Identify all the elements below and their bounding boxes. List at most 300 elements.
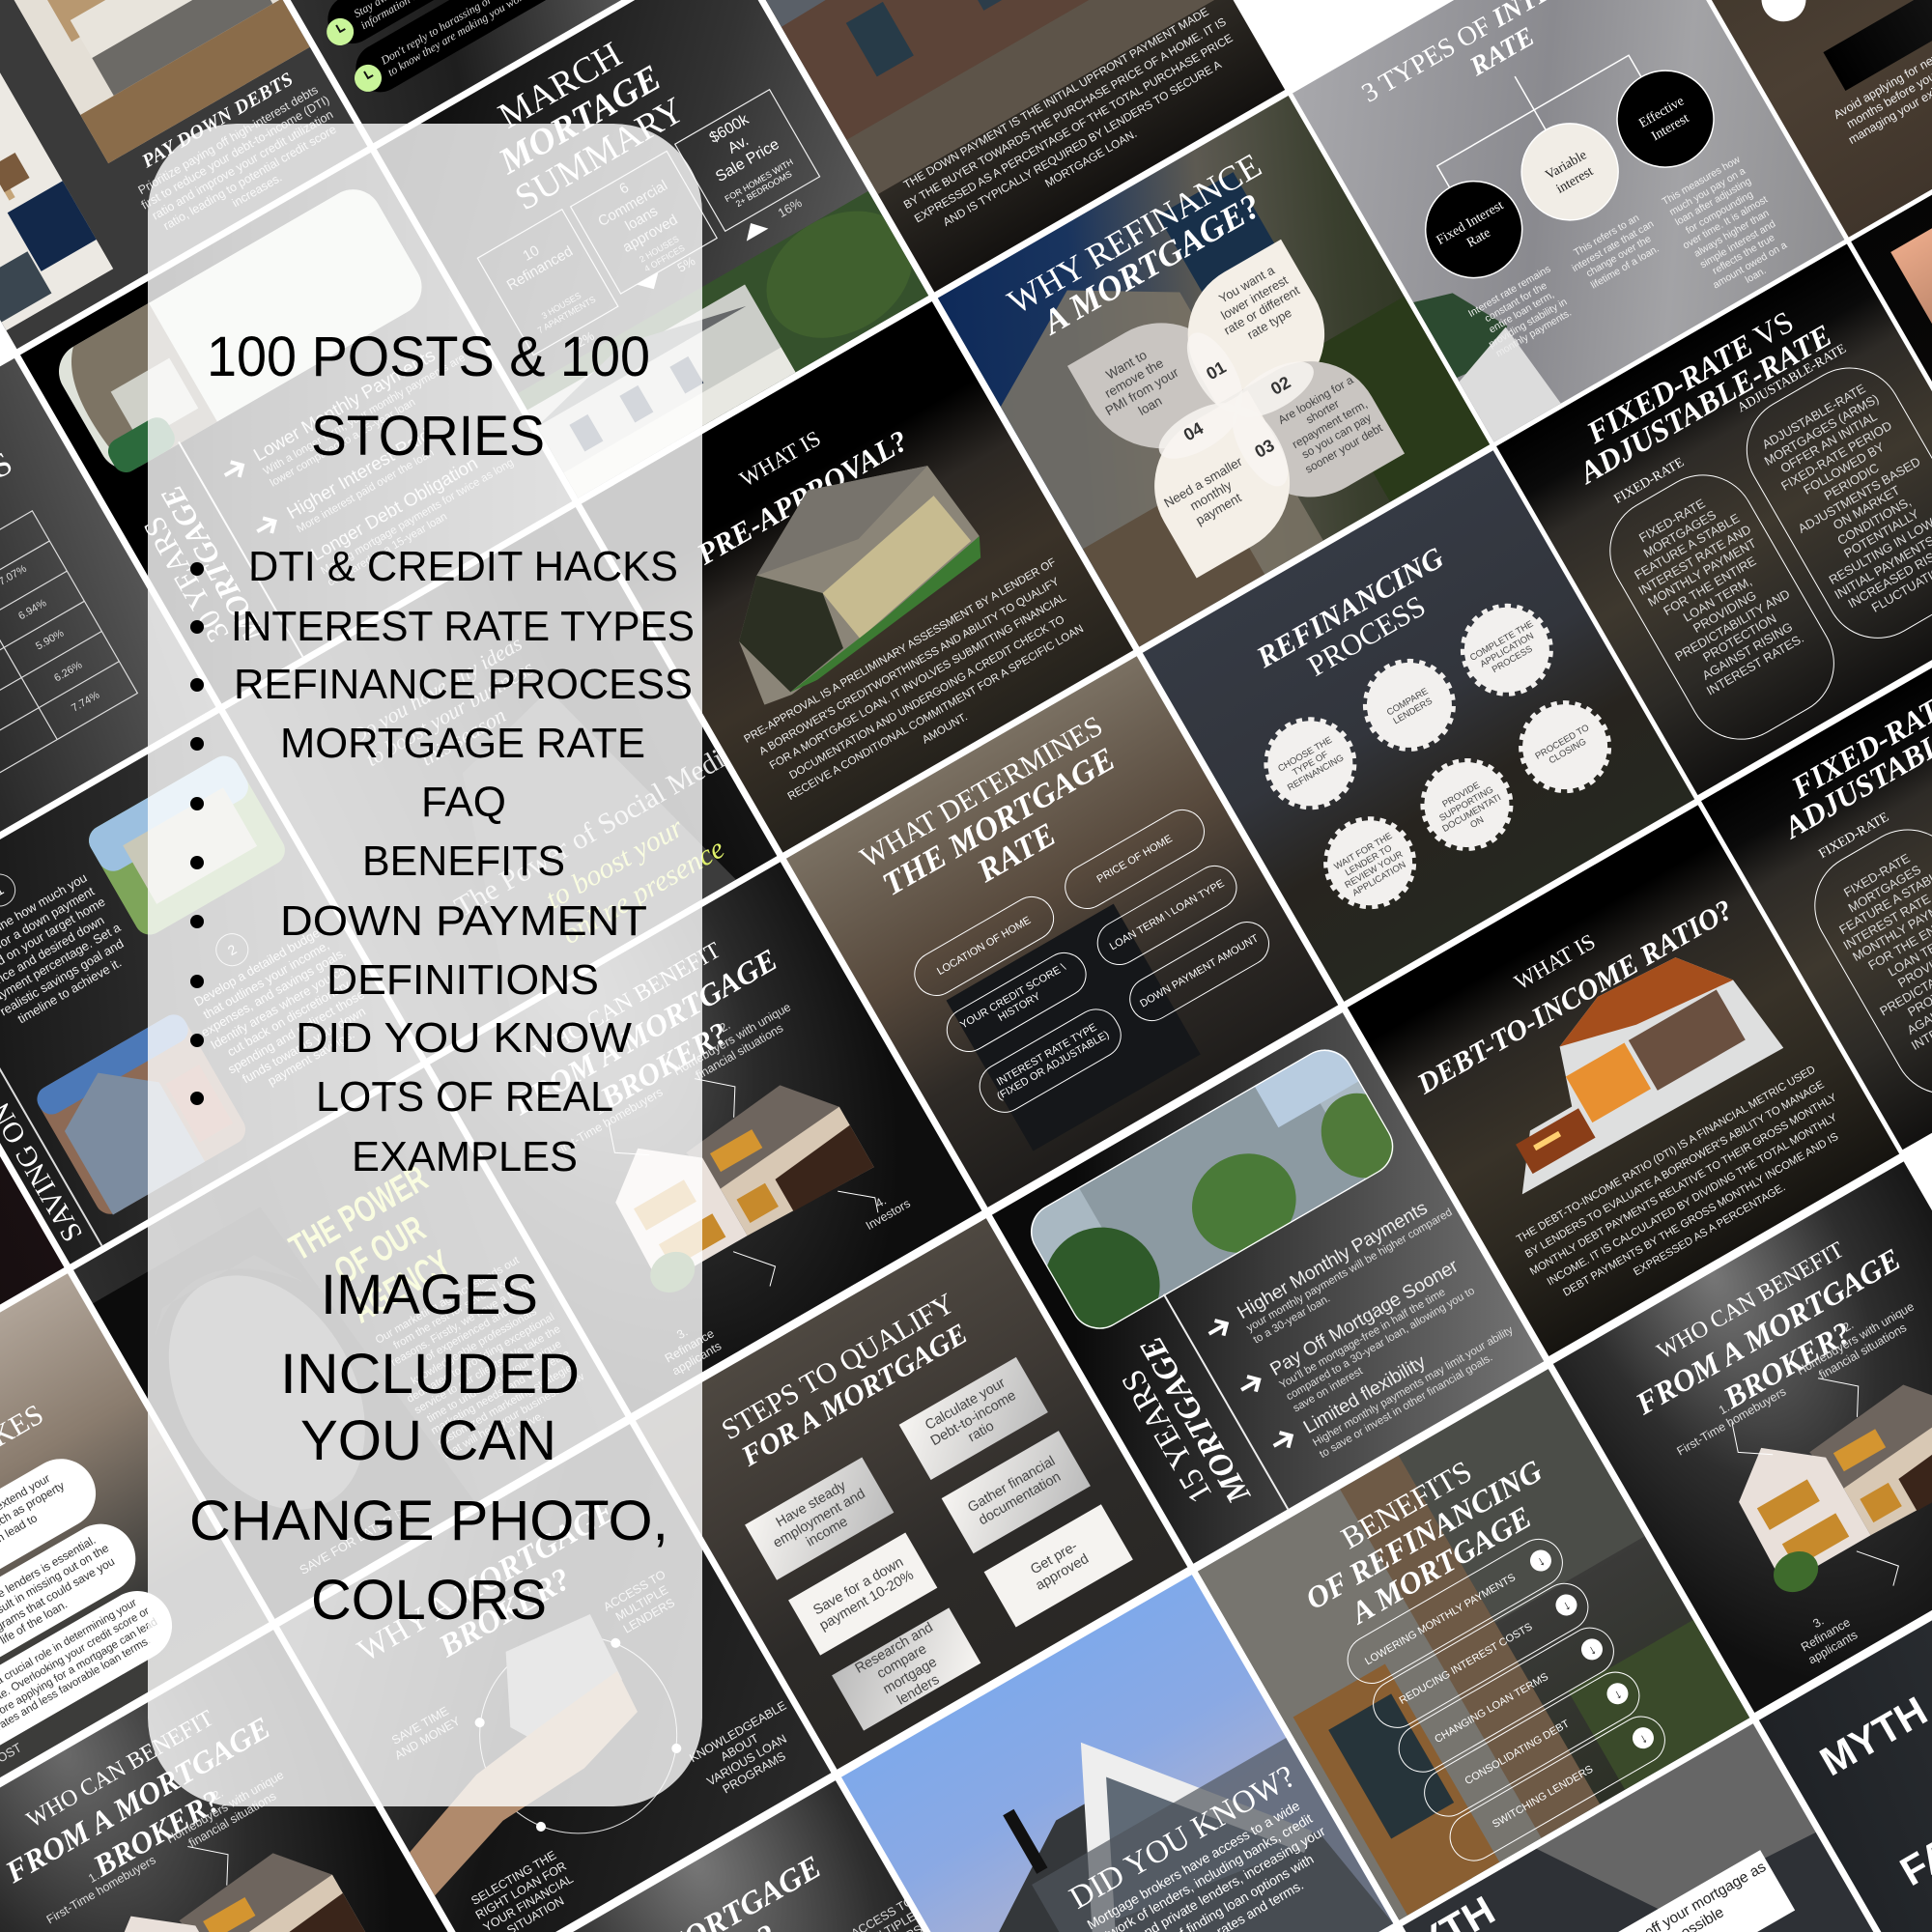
card: mortgage broker copy [485, 1780, 1037, 1932]
column label: ADJUSTABLE-RATE [1735, 342, 1849, 415]
step card [942, 1431, 1091, 1553]
label: Refinance applicants [663, 1326, 724, 1378]
text under circle: This refers to an interest rate that can change over the lifetime of a loan. [1570, 213, 1661, 291]
pill: ↓ [1636, 1729, 1650, 1747]
arrow icons [1200, 1309, 1307, 1465]
title: BROKER? [1718, 1315, 1857, 1415]
pill: INTEREST RATE TYPE (FIXED OR ADJUSTABLE) [995, 1022, 1111, 1102]
title [1370, 843, 1762, 1118]
pill: ↓ [1534, 1552, 1548, 1569]
card: myth statement [1403, 1723, 1932, 1932]
card: 15 years mortgage [992, 1012, 1544, 1564]
card: who can benefit (bottom left copy) [0, 1630, 474, 1932]
card: fixed-rate vs adjustable-rate [1496, 243, 1932, 795]
column label: FIXED-RATE [1612, 455, 1687, 507]
stat text: 2 HOUSES [638, 234, 681, 265]
column label: FIXED-RATE [1817, 810, 1891, 862]
body text: EXPRESSED AS A PERCENTAGE. [1632, 1181, 1787, 1278]
stat text: loans [622, 203, 661, 235]
step card: Research and compare mortgage lenders [852, 1620, 942, 1708]
title: BENEFITS [1335, 1453, 1477, 1555]
vertical divider [0, 1056, 102, 1246]
stat text: $600k [707, 111, 752, 147]
text: Do you have any ideas [346, 631, 526, 749]
label: SAVE TIME AND MONEY [389, 1704, 463, 1762]
row text: Making mortgage payments for twice as long compared to a 15-year loan [319, 457, 516, 588]
step card: Have steady employment and income [771, 1478, 867, 1551]
petal text: You want a lower interest rate or different rate type [1216, 263, 1302, 342]
photo: hand and shirt [225, 507, 777, 1059]
panel text: INTEREST RATE TYPES [231, 603, 695, 650]
panel text: LOTS OF REAL [316, 1073, 613, 1121]
body text: FOR A MORTGAGE LOAN. IT INVOLVES SUBMITTING FINANCIAL [768, 592, 1068, 772]
title: FOR A MORTGAGE [736, 1318, 973, 1473]
row text: Limited flexibility [1300, 1351, 1430, 1438]
title: WHO CAN BENEFIT [1653, 1237, 1848, 1365]
label: ACCESS TO MULTIPLE LENDERS [601, 1568, 677, 1636]
scalloped circles: LENDERS [1391, 696, 1435, 726]
pill: YOUR CREDIT SCORE \ HISTORY [958, 962, 1068, 1032]
label: Refinance applicants [1799, 1615, 1860, 1667]
scalloped circles: LENDER TO [1344, 843, 1394, 878]
step card [745, 1458, 894, 1580]
scalloped circles: APPLICATION [1350, 860, 1408, 898]
card: what determines mortgage rate [786, 656, 1338, 1208]
label [143, 1747, 307, 1867]
photo: modern house [1198, 1369, 1749, 1920]
scalloped circles: DOCUMENTATI [1440, 792, 1503, 835]
body text: DOCUMENTATION AND UNDERGOING A CREDIT CHECK TO [787, 613, 1066, 781]
card: who can benefit (right) [1553, 1161, 1932, 1713]
title: THE MORTGAGE [876, 741, 1122, 903]
translucent text panel [148, 124, 702, 1806]
tip pill [0, 1511, 148, 1734]
panel text: EXAMPLES [352, 1133, 578, 1180]
step card: Gather financial documentation [965, 1454, 1064, 1528]
rates table: 5.90% [34, 627, 66, 653]
title: ADJUSTABLE-RATE [1574, 317, 1837, 490]
portrait tones [73, 1154, 475, 1619]
text: to boost your [540, 811, 689, 916]
body text: Prioritize paying off high-interest debts first to reduce your debt-to-income (DTI) ratio and improve your credit utilization ratio, leading to potential credit score increases. [136, 83, 339, 233]
row text: Pay Off Mortgage Sooner [1266, 1256, 1462, 1380]
panel text: DID YOU KNOW [296, 1014, 632, 1062]
card: myth vs fact dark [1759, 1518, 1932, 1932]
heading: MYTH [1812, 1688, 1932, 1784]
panel text: IMAGES [321, 1264, 538, 1326]
stat text: 2+ BEDROOMS [734, 169, 794, 209]
label [530, 1065, 679, 1167]
body text: THE DEBT-TO-INCOME RATIO (DTI) IS A FINANCIAL METRIC USED [1515, 1064, 1817, 1245]
petal text: Are looking for a shorter repayment term, so you can pay sooner your debt [1276, 373, 1384, 475]
panel text: DEFINITIONS [327, 956, 599, 1004]
vertical title: 30 YEARS [136, 511, 236, 648]
right outline column [1727, 348, 1932, 658]
title: A MORTGAGE [1345, 1499, 1537, 1631]
panel text: 100 POSTS & 100 [207, 326, 650, 388]
icon: crescent moon [1750, 0, 1817, 32]
left text: FIXED-RATE MORTGAGES FEATURE A STABLE INTEREST RATE AND MONTHLY PAYMENT FOR THE ENTIRE LOAN TERM, PROVIDING PREDICTABILITY AND PROTECTION AGAINST RISING INTEREST RATES. [1632, 496, 1806, 697]
body text: AMOUNT. [921, 711, 969, 746]
stat text: 7 APARTMENTS [536, 295, 597, 335]
title: PRE-APPROVAL? [692, 423, 914, 571]
text: The Power of Social Media [449, 736, 741, 923]
label: 3. [1810, 1614, 1826, 1631]
tip pill [0, 1578, 185, 1801]
scalloped circles: TYPE OF [1291, 750, 1330, 779]
rates table [0, 445, 139, 773]
pill [1441, 1707, 1674, 1870]
body text [721, 542, 1124, 838]
label: 1. [593, 1101, 609, 1118]
scalloped circles: REVIEW YOUR [1343, 849, 1405, 891]
photo: white farmhouse [0, 1630, 474, 1932]
label: 1. [1717, 1401, 1732, 1417]
vertical divider [1163, 1293, 1289, 1510]
save icon: SAVE FOR LATER ⚐ [297, 1505, 409, 1577]
step card [832, 1607, 980, 1731]
row text: Longer Debt Obligation [308, 453, 482, 565]
title [1167, 493, 1550, 752]
card: dark corner [0, 919, 64, 1470]
title [1222, 1388, 1625, 1681]
body text: MORTGAGE LOAN. [1042, 127, 1139, 190]
title: BROKER? [434, 1562, 577, 1664]
pill: PRICE OF HOME [1094, 833, 1175, 885]
black pills with clock icons [327, 0, 561, 93]
scalloped circles: REFINANCING [1286, 753, 1346, 793]
pill [1057, 802, 1212, 917]
dark kitchen block [947, 904, 1201, 1151]
title: BROKER? [87, 1783, 227, 1884]
row text: Higher monthly payments may limit your ability to save or invest in other financial goals. [1311, 1324, 1516, 1461]
stat text: 10 [520, 242, 542, 265]
label [23, 1833, 172, 1932]
stat text: Commercial [595, 177, 670, 230]
vertical title: MORTGAGE [1133, 1330, 1258, 1509]
pill: DOWN PAYMENT AMOUNT [1138, 932, 1261, 1009]
step number: 2 [225, 941, 240, 958]
connector lines and circles: Variable [1543, 148, 1589, 184]
title: WHAT IS [735, 426, 825, 492]
photo: suburban house [83, 751, 291, 940]
stat boxes and trend triangles [477, 89, 821, 355]
stat boxes and trend triangles: 16% [776, 195, 805, 220]
panel text: FAQ [421, 779, 506, 826]
title: REFINANCING [1251, 540, 1449, 674]
rates table: 6.26% [52, 659, 84, 684]
title: MORTAGE [492, 57, 668, 183]
card: power of social media [225, 507, 777, 1059]
title: FIXED-RATE VS [1580, 303, 1800, 450]
stat text: 6 [616, 180, 632, 198]
row text: Lower Monthly Payments [250, 345, 440, 466]
connector lines and circles [1293, 0, 1844, 442]
step card: Save for a down payment 10-20% [810, 1554, 917, 1634]
pill: LOAN TERM \ LOAN TYPE [1108, 877, 1226, 952]
connector lines and circles: Fixed Interest [1435, 198, 1506, 248]
rates table: 7.74% [70, 690, 101, 715]
label: Homebuyers with unique financial situations [164, 1768, 286, 1850]
pill: LOWERING MONTHLY PAYMENTS [1363, 1572, 1518, 1667]
stat text: FOR HOMES WITH [723, 156, 795, 204]
title: STEPS TO QUALIFY [717, 1287, 960, 1446]
photo: kitchen [0, 72, 114, 330]
title: SUMMARY [508, 90, 692, 218]
panel text: CHANGE PHOTO, [189, 1490, 668, 1552]
title [443, 885, 850, 1184]
title: AGENCY [345, 1243, 458, 1331]
body text: EXPRESSED AS A PERCENTAGE OF THE TOTAL PURCHASE PRICE [912, 31, 1235, 225]
body text: PRE-APPROVAL IS A PRELIMINARY ASSESSMENT BY A LENDER OF [742, 556, 1058, 746]
vertical title: MORTGAGE [154, 479, 271, 648]
step card: Calculate your Debt-to-income ratio [923, 1376, 1018, 1449]
card: power of our agency [73, 1067, 625, 1619]
card: 30 years mortgage [20, 153, 572, 703]
title: MARCH [492, 34, 629, 137]
scalloped circles: CHOOSE THE [1276, 735, 1334, 775]
connector lines and circles: Interest [1649, 111, 1691, 144]
pill: CHANGING LOAN TERMS [1433, 1671, 1550, 1746]
body text: THE DOWN PAYMENT IS THE INITIAL UPFRONT PAYMENT MADE [901, 5, 1211, 191]
title: WHAT IS [1510, 929, 1600, 995]
title [280, 1155, 480, 1345]
circle with house in hand [279, 1424, 831, 1932]
four petal diagram: 01 [1203, 357, 1230, 384]
title: OF OUR [327, 1208, 432, 1293]
panel text: BENEFITS [362, 838, 565, 885]
stat text [595, 177, 686, 273]
row text: With a longer term, your monthly payments are lower compared to a 15-year loan [262, 352, 468, 489]
title [798, 676, 1202, 971]
row text [1266, 1243, 1503, 1416]
title: WHAT DETERMINES [855, 710, 1108, 874]
title: DEBT-TO-INCOME RATIO? [1412, 894, 1738, 1100]
card: fixed-rate vs adjustable-rate (copy) [1701, 599, 1932, 1150]
body text: DEBT PAYMENTS BY THE GROSS MONTHLY INCOME AND IS [1561, 1131, 1840, 1299]
photo: white farmhouse [1553, 1161, 1932, 1713]
card: refinancing process [1143, 450, 1694, 1002]
scalloped circles: PROCEED TO [1534, 723, 1591, 762]
title: WHY A MORTGAGE [353, 1493, 621, 1669]
label: 2. [717, 1018, 732, 1035]
panel text: DOWN PAYMENT [280, 897, 647, 945]
four petal diagram [938, 96, 1490, 647]
stat text: Av. [725, 132, 752, 157]
four petal diagram: 03 [1251, 436, 1278, 462]
text: online presence [556, 833, 730, 951]
label [1774, 1279, 1932, 1399]
title: FROM A MORTGAGE [506, 942, 783, 1122]
scalloped circles: COMPARE [1385, 686, 1430, 718]
pill [1089, 858, 1245, 973]
panel text: REFINANCE PROCESS [234, 661, 693, 708]
card: why mortgage broker [279, 1424, 831, 1932]
stat boxes and trend triangles: 12% [568, 328, 597, 354]
title: FROM A MORTGAGE [0, 1710, 276, 1889]
stat text [707, 111, 795, 209]
pill [1390, 1619, 1623, 1781]
title [492, 34, 692, 218]
petal text: Want to remove the PMI from your loan [1102, 348, 1181, 418]
photo: gabled roof [841, 1575, 1393, 1932]
card: clock list on dark photo [172, 0, 724, 143]
pill: ↓ [1610, 1686, 1624, 1702]
label: 3. [674, 1325, 690, 1342]
pill [906, 889, 1062, 1004]
card: down payment definition [733, 0, 1285, 292]
pill: CONSOLIDATING DEBT [1463, 1718, 1572, 1787]
body text: MONTHLY DEBT PAYMENTS RELATIVE TO THEIR GROSS MONTHLY [1528, 1092, 1839, 1278]
text [254, 578, 645, 850]
text: to boost your business [361, 655, 538, 771]
label: First-Time homebuyers [44, 1853, 158, 1926]
step card [899, 1357, 1048, 1480]
title [508, 1821, 895, 1932]
connector lines and circles: Rate [1464, 226, 1493, 251]
title [0, 1653, 343, 1932]
photo: gray blue townhouse [32, 1009, 251, 1220]
row text: You'll be mortgage-free in half the time compared to a 30-year loan, allowing you to save on interest [1278, 1286, 1477, 1414]
pill: ↓ [1585, 1641, 1599, 1658]
pill [1364, 1575, 1598, 1737]
pill [971, 1001, 1129, 1122]
title [594, 339, 990, 620]
scalloped circles [1143, 450, 1694, 1002]
vertical title [1100, 1320, 1264, 1536]
label: 4. [873, 1194, 889, 1210]
dark house siding [1403, 1723, 1932, 1932]
photo: bedroom [14, 0, 310, 164]
body text: AND IS TYPICALLY REQUIRED BY LENDERS TO SECURE A [941, 58, 1224, 229]
pill: ↓ [1559, 1597, 1573, 1613]
card: saving on down payment [0, 713, 420, 1264]
label: 2. [211, 1786, 226, 1803]
title [1567, 1185, 1932, 1485]
title: WHY REFINANCE [1001, 146, 1267, 322]
step card [984, 1504, 1133, 1627]
card: benefits of refinancing a mortgage [1198, 1369, 1749, 1920]
text [411, 713, 819, 1015]
tip pill [0, 1446, 108, 1668]
panel text: MORTGAGE RATE [280, 720, 645, 767]
vertical divider [178, 441, 303, 657]
vertical title: 15 YEARS [1115, 1363, 1219, 1509]
card: why refinance a mortgage [938, 96, 1490, 647]
body text: RECEIVE A CONDITIONAL COMMITMENT FOR A SPECIFIC LOAN [786, 623, 1086, 803]
title: THE POWER [283, 1158, 435, 1269]
row text: your monthly payments will be higher compared to a 30-year loan. [1245, 1208, 1455, 1347]
card: pre-approval [582, 301, 1133, 853]
panel text: STORIES [311, 405, 545, 468]
title: RATE [1464, 21, 1540, 82]
step number [0, 867, 21, 913]
label: First-Time homebuyers [1674, 1384, 1788, 1459]
arrow icons [224, 460, 277, 533]
pill [1339, 1530, 1572, 1692]
translucent text area [1032, 1738, 1393, 1932]
row text: More interest paid over the loan [295, 447, 436, 535]
card: steps to qualify for a mortgage [636, 1218, 1187, 1770]
label [645, 1308, 734, 1384]
title [1304, 0, 1686, 167]
card: table of rates [0, 358, 215, 909]
pill [1122, 914, 1277, 1029]
row text: Higher Interest Paid [284, 425, 435, 524]
scalloped circles: COMPLETE THE [1468, 619, 1535, 664]
step text: Develop a detailed budget that outlines your income, expenses, and savings goals. Identify areas where you can cut back on discretionary spending and redirect those funds towards your down payment savings. [191, 923, 368, 1089]
title: WHO CAN BENEFIT [529, 938, 725, 1065]
step card [788, 1532, 937, 1656]
scalloped circles: APPLICATION [1478, 631, 1536, 670]
label: Homebuyers with unique financial situations [1795, 1299, 1917, 1381]
title: BROKER? [594, 1015, 734, 1116]
connector lines and circles: Effective [1636, 94, 1687, 131]
photo: white farmhouse [430, 862, 981, 1413]
stat boxes and trend triangles: 5% [675, 253, 698, 275]
text under circle: Interest rate remains constant for the entire loan term, providing stability in monthly payments. [1466, 263, 1574, 360]
left outline column [1590, 455, 1854, 759]
stat text [504, 242, 597, 335]
panel text: COLORS [311, 1569, 547, 1632]
pill: REDUCING INTEREST COSTS [1398, 1621, 1534, 1707]
label: KNOWLEDGEABLE ABOUT VARIOUS LOAN PROGRAMS [687, 1698, 789, 1796]
title: DID YOU KNOW? [1064, 1759, 1301, 1917]
card: 3 types of interest rate [1293, 0, 1844, 442]
stat text: Sale Price [713, 136, 782, 185]
title: A MORTGAGE? [1037, 185, 1267, 342]
four petal diagram: 04 [1180, 418, 1207, 444]
title: PROCESS [1302, 588, 1431, 683]
pill [1415, 1662, 1649, 1826]
title: FROM A MORTGAGE [1630, 1241, 1906, 1421]
photo: suburban house [518, 191, 928, 497]
body text: A BORROWER'S CREDITWORTHINESS AND ABILITY TO QUALIFY [757, 576, 1061, 757]
body text: Our marketing agency stands out from the rest for several key reasons. Firstly, we have a team of experienced and knowledgeable professionals dedicated to providing exceptional service to our clients. We take the time to understand your unique marketing needs, and we create customized marketing strategies that will help your business grow and thrive. [374, 1255, 586, 1461]
card: who can benefit (center copy) [430, 862, 981, 1413]
text: this season [416, 702, 510, 771]
card: pay down debts [0, 0, 367, 349]
card: mistakes to avoid [0, 1273, 269, 1825]
stat text: Refinanced [504, 243, 576, 294]
label [650, 980, 814, 1099]
label: Homebuyers with unique financial situations [671, 1000, 793, 1082]
left outline column [1795, 810, 1932, 1114]
panel text: DTI & CREDIT HACKS [248, 543, 678, 590]
title [1507, 263, 1889, 518]
label: 1. [86, 1869, 101, 1886]
scalloped circles: CLOSING [1548, 736, 1588, 766]
rates table: 6.94% [16, 597, 48, 622]
petal text: Need a smaller monthly payment [1161, 454, 1245, 528]
label: 2. [1840, 1318, 1856, 1335]
title [302, 1464, 690, 1730]
label [1654, 1364, 1803, 1466]
title: OF REFINANCING [1299, 1453, 1548, 1616]
body text: BY THE BUYER TOWARDS THE PURCHASE PRICE OF A HOME. IT IS [901, 14, 1229, 212]
card: march mortgage summary [377, 0, 928, 497]
card: avoid new credit [1647, 0, 1932, 238]
photo: warm lit house [1890, 107, 1932, 503]
title [655, 1252, 1038, 1511]
scalloped circles: PROVIDE [1440, 781, 1482, 810]
stat text: 4 OFFICES [642, 242, 686, 273]
step number [210, 927, 255, 972]
text under circle: This measures how much you pay on a loan after adjusting for compounding over time. It is almost always higher than simple interest and reflects the true amount owed on a loan. [1661, 154, 1789, 291]
card: debt-to-income ratio [1348, 805, 1899, 1356]
body text: INCOME. IT IS CALCULATED BY DIVIDING THE TOTAL MONTHLY [1546, 1112, 1839, 1288]
photo tones [1001, 172, 1490, 647]
